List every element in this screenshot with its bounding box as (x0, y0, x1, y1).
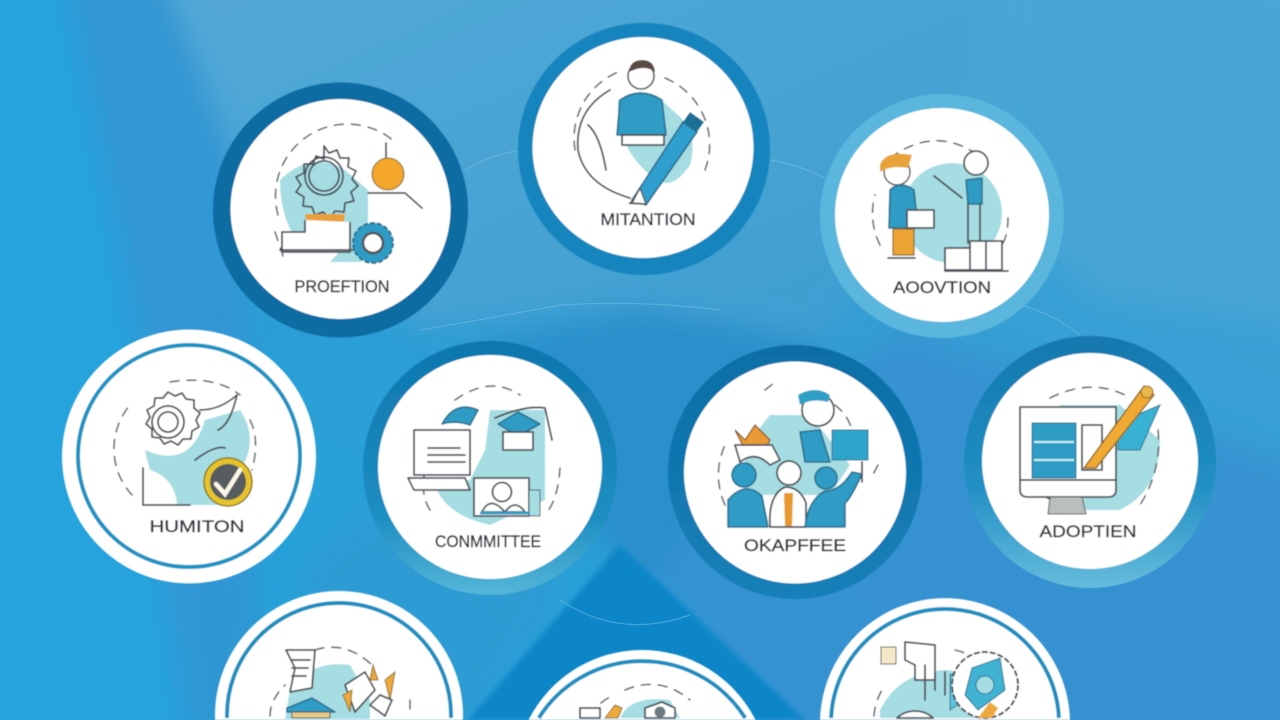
badge: ADOPTIEN (964, 336, 1216, 588)
label: OKAPFFEE (744, 536, 846, 555)
icon: monitor, figures and brain (874, 642, 1018, 718)
badge: lower left (cropped) (215, 591, 463, 720)
label: ADOPTIEN (1040, 522, 1136, 541)
badge: PROEFTION (213, 82, 468, 338)
icon: two people at podium (873, 141, 1008, 271)
badge: AOOVTION (820, 94, 1064, 338)
icon: document, figures and house (270, 647, 410, 719)
badge: OKAPFFEE (668, 345, 922, 599)
badge: lower centre (cropped) (528, 650, 756, 720)
label: AOOVTION (893, 278, 991, 297)
icon: person with pencil (574, 60, 710, 205)
icon: hook and shield (580, 684, 690, 718)
label: PROEFTION (294, 277, 390, 296)
icon: gear, ribbon and check badge (114, 380, 256, 506)
label: MITANTION (600, 210, 696, 229)
badge: CONMMITTEE (363, 341, 617, 595)
badge: HUMITON (62, 330, 316, 584)
badge: lower right (cropped) (820, 598, 1070, 720)
icon: laptop, cap and video screen (408, 386, 560, 525)
label: HUMITON (150, 517, 244, 536)
icon: gears and orange ball (275, 124, 422, 263)
label: CONMMITTEE (435, 532, 541, 551)
icon: team around presenter (718, 380, 878, 527)
badge: MITANTION (518, 23, 770, 275)
icon: monitor with orange pen (1020, 386, 1160, 514)
